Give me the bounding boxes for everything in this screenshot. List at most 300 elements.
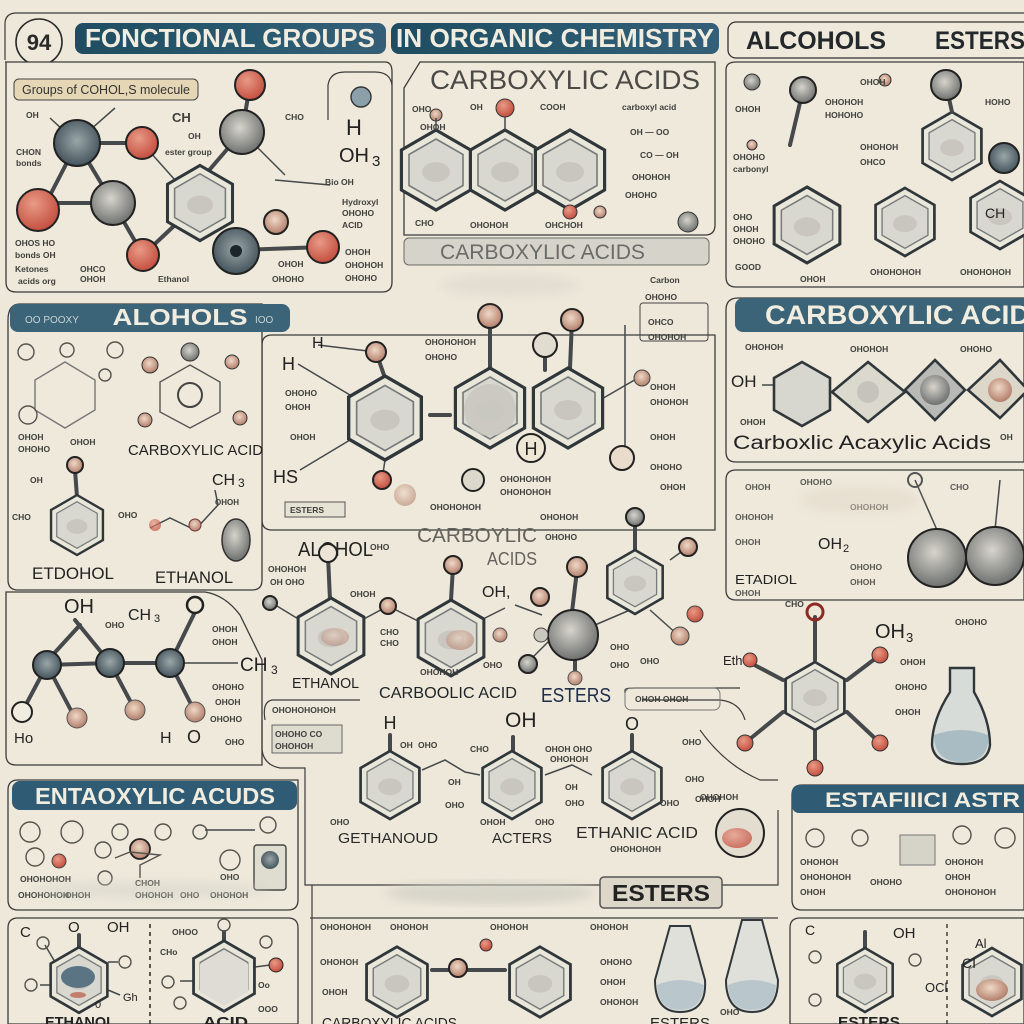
banner: ENTAOXYLIC ACUDS — [35, 783, 275, 809]
small box: ESTERS — [290, 505, 324, 515]
notes: OHOH OHO — [545, 744, 593, 754]
notes: OHOHO — [733, 236, 766, 246]
small notes: OHOHOH — [345, 260, 383, 270]
labels: H and HS: HS — [273, 467, 298, 487]
notes — [735, 477, 969, 598]
notes: OHOH — [212, 624, 238, 634]
small notes: OHOS HO — [15, 238, 56, 248]
notes: OHOHOH — [540, 512, 578, 522]
banner: ESTAFIIICI ASTR — [825, 789, 1020, 812]
notes: Carbon — [650, 275, 680, 285]
notes: OHOH — [285, 402, 310, 412]
small notes: Ketones — [15, 264, 49, 274]
notes: OHOHOHOH — [320, 922, 371, 932]
labels: O — [187, 727, 201, 747]
label: OH3 and notes: OHOHO — [955, 617, 988, 627]
doodles and notes: OHOHOHOH — [945, 887, 996, 897]
notes: OHOHO — [800, 477, 832, 487]
notes: OHOHOHOH — [960, 267, 1011, 277]
notes: OHO — [483, 660, 503, 670]
small notes: ester group — [165, 147, 212, 157]
notes: OHOH — [660, 482, 686, 492]
label: ethanol: ETHANOL — [292, 675, 359, 692]
title banner left: FONCTIONAL GROUPS — [85, 23, 375, 53]
panel: centre molecule — [262, 275, 715, 530]
labels — [735, 536, 849, 587]
heading: carboxylic acids faded: CARBOYLIC — [417, 525, 537, 547]
notes: OHOH — [480, 817, 506, 827]
notes: OHOHOH — [648, 332, 686, 342]
notes: OHO — [565, 798, 585, 808]
molecule: two rings — [367, 939, 570, 1017]
notes: OHO — [685, 774, 705, 784]
alcohols esters tab — [728, 22, 1024, 58]
notes: OHOH — [735, 104, 760, 114]
labels: H and HS — [273, 335, 324, 487]
notes: OHOHOHOH — [500, 474, 551, 484]
labels — [14, 596, 278, 747]
box: top left: OHOHOHOHOH — [272, 705, 336, 715]
icon: small atom — [328, 72, 392, 120]
notes: OHO — [180, 890, 200, 900]
notes: OHO — [720, 1007, 740, 1017]
notes: OHOH — [733, 224, 758, 234]
notes — [740, 342, 1013, 442]
labels: H and OH3: 3 — [372, 153, 380, 170]
notes: OHOH — [800, 274, 826, 284]
notes: OHOHO — [645, 292, 678, 302]
title banner right: IN ORGANIC CHEMISTRY — [396, 23, 714, 53]
labels: 3 — [154, 613, 160, 625]
banner: alohols: OO POOXY — [25, 315, 79, 326]
label: OH3 and notes: OHOH — [895, 707, 920, 717]
labels: H and OH3 — [339, 115, 380, 170]
dashed divider — [149, 924, 151, 1024]
labels: names — [338, 825, 698, 847]
captions — [322, 1015, 710, 1024]
label: OH: OH, — [482, 584, 510, 601]
labels: CH — [128, 607, 151, 624]
notes: carbonyl — [733, 164, 768, 174]
small notes: CHO — [285, 112, 304, 122]
label: OH3 and notes: OHOH — [900, 657, 926, 667]
notes: OHOHO — [545, 532, 578, 542]
labels: 0 — [95, 999, 101, 1011]
notes: OHO — [660, 798, 680, 808]
notes: CHO — [380, 627, 399, 637]
notes: OHO — [220, 872, 240, 882]
tag: alcohols — [14, 79, 198, 100]
number badge: 94 — [27, 30, 52, 55]
notes: OHOHOH — [735, 512, 773, 522]
labels: H OH O: OH — [505, 709, 536, 732]
notes: OHOHOH — [470, 220, 508, 230]
notes: OHOH — [735, 537, 760, 547]
notes — [285, 275, 688, 522]
label: OH3 and notes: OH — [875, 621, 905, 643]
small box right — [640, 303, 708, 341]
notes — [330, 737, 738, 854]
molecule: ethanol ring — [25, 935, 131, 1013]
notes: OHOHOH — [860, 142, 898, 152]
notes: CHO — [470, 744, 489, 754]
notes: OHOHOHOH — [870, 267, 921, 277]
small notes: OHOH — [80, 274, 106, 284]
notes: OHOHO — [285, 388, 318, 398]
box: top left: OHOHO CO — [275, 729, 323, 739]
small notes: Hydroxyl — [342, 197, 378, 207]
notes: OHOHO — [650, 462, 682, 472]
labels: H and OH3: H — [346, 115, 362, 140]
panel: carboxylic acids top — [401, 62, 715, 235]
notes — [12, 432, 239, 522]
note box right — [625, 688, 740, 710]
labels: OCl — [925, 980, 948, 995]
notes: OHOH — [650, 382, 676, 392]
molecule: two rings — [263, 544, 507, 676]
notes: OHOH — [212, 637, 238, 647]
small notes: CH — [172, 110, 191, 125]
small notes: OH — [26, 110, 39, 120]
notes: OHOHOH — [420, 667, 458, 677]
labels: 2 — [843, 543, 849, 555]
doodles and notes: OHOHOH — [800, 857, 838, 867]
notes: OHOHOH — [490, 922, 528, 932]
tag: carboxylic acids centre — [404, 238, 709, 265]
notes: OHOHO — [600, 957, 632, 967]
notes: OHOH — [215, 697, 240, 707]
notes: OHOH — [745, 482, 770, 492]
notes: OHO — [682, 737, 702, 747]
notes: CO — OH — [640, 150, 679, 160]
molecule: ethanol ring — [51, 457, 103, 555]
notes: OHOHOH — [320, 957, 358, 967]
notes: OH — [1000, 432, 1013, 442]
labels: H and HS: H — [312, 335, 324, 352]
notes: OH — [470, 102, 483, 112]
panel: bottom right esters — [790, 918, 1024, 1024]
notes: OHO — [105, 620, 125, 630]
notes: OHOH — [695, 794, 720, 804]
notes: OHOH — [735, 588, 760, 598]
labels: H and HS: H — [282, 354, 295, 374]
molecule: ester rings — [809, 932, 1021, 1016]
number badge — [16, 19, 62, 65]
banner: alohols: IOO — [255, 315, 274, 326]
label: OH3 and notes: OHOHO — [895, 682, 928, 692]
tag: esters: ESTERS — [612, 880, 710, 906]
tag: carboxylic acids centre: CARBOXYLIC ACIDS — [440, 241, 645, 264]
small notes: acids org — [18, 276, 56, 286]
notes: OH — [30, 475, 43, 485]
small notes: bonds OH — [15, 250, 56, 260]
panel: bottom centre esters — [310, 877, 778, 1024]
notes: OHOHO — [850, 562, 882, 572]
icon: round atom — [716, 809, 764, 857]
molecule: acid ring: CHo — [160, 947, 177, 957]
labels: C — [805, 922, 815, 938]
notes: CHO — [950, 482, 969, 492]
labels: 3 — [271, 663, 278, 677]
labels — [32, 564, 233, 587]
labels: CH — [240, 655, 267, 676]
notes: OHOHOH — [850, 502, 888, 512]
molecule: ethanol chain: 3 — [238, 476, 245, 490]
notes: OHO — [610, 642, 630, 652]
molecule: ester ring — [515, 508, 703, 685]
small notes: OHOHO — [342, 208, 374, 218]
notes — [412, 102, 679, 230]
labels: H OH O: O — [625, 714, 639, 734]
small notes: OHOHO — [272, 274, 304, 284]
notes: OHOHOH — [825, 97, 863, 107]
doodle atoms — [20, 817, 286, 890]
notes: OHOH — [420, 122, 446, 132]
notes: OHOH — [650, 432, 676, 442]
notes: OHO — [118, 510, 138, 520]
doodles and notes: OHOHOHOH — [800, 872, 851, 882]
notes: OHOH — [322, 987, 348, 997]
notes: OH — OO — [630, 127, 670, 137]
notes — [320, 922, 740, 1017]
labels: CI — [962, 955, 976, 971]
labels: ETADIOL — [735, 572, 797, 587]
molecule: central rings: H — [524, 439, 538, 459]
notes: carboxyl acid — [622, 102, 676, 112]
banner: alohols — [10, 304, 290, 332]
small notes: bonds — [16, 158, 42, 168]
labels: H — [160, 730, 172, 747]
molecule: central rings — [298, 304, 650, 506]
notes: CHO — [415, 218, 434, 228]
heading: carboxylic acids faded: ACIDS — [487, 549, 537, 569]
doodles and notes: OHOH — [945, 872, 970, 882]
notes: OHOHOH — [210, 890, 248, 900]
box: top left — [272, 705, 342, 753]
notes: OHOHOH — [268, 564, 306, 574]
notes: OHO — [330, 817, 350, 827]
molecule: chain: OH — [731, 372, 756, 391]
small notes: OH — [188, 131, 201, 141]
labels — [805, 922, 987, 1024]
small notes: CHON — [16, 147, 41, 157]
panel: carboxylic acids lower left — [8, 780, 298, 910]
banner: alohols: ALOHOLS — [112, 304, 248, 330]
notes: OHOHO — [212, 682, 244, 692]
notes: CHO — [380, 638, 399, 648]
notes: OHOHOHOH — [18, 890, 69, 900]
box: top left: OHOHOH — [275, 741, 313, 751]
small notes — [15, 110, 383, 286]
molecule: acid ring: Oo — [258, 980, 270, 990]
labels: Gh — [123, 992, 138, 1004]
notes: OH — [448, 777, 461, 787]
molecule: acid ring: OOO — [258, 1004, 278, 1014]
molecule: upper ring structures — [18, 342, 247, 428]
molecule: acid ring: OHOO — [172, 927, 198, 937]
small notes: OHOH — [278, 259, 304, 269]
label: OH3 and notes — [723, 599, 988, 717]
heading: CARBOXYLIC ACIDS — [430, 65, 700, 95]
labels: ETDOHOL — [32, 564, 114, 583]
label: OH3 and notes: Eth — [723, 653, 743, 668]
faded banner — [385, 881, 595, 905]
labels: C — [20, 924, 31, 941]
notes: GOOD — [735, 262, 761, 272]
label: carboxylic acid: CARBOOLIC ACID — [379, 685, 517, 702]
molecule: ethanol chain — [149, 472, 250, 561]
notes: OHO — [370, 542, 390, 552]
notes: OHOHOHOH — [425, 337, 476, 347]
labels: Al — [975, 936, 987, 951]
small notes: Ethanol — [158, 274, 189, 284]
notes: OHOHOH — [590, 922, 628, 932]
molecule: ball and stick — [17, 70, 339, 274]
notes: OHO — [445, 800, 465, 810]
notes: CHO — [12, 512, 31, 522]
labels: ETHANOL — [155, 568, 233, 587]
notes: OHOH — [740, 417, 766, 427]
notes: OHO — [225, 737, 245, 747]
notes — [733, 77, 1011, 284]
notes — [268, 532, 660, 677]
notes: OHOHO — [210, 714, 242, 724]
notes: OHOH — [70, 437, 96, 447]
notes: OHO — [535, 817, 555, 827]
labels: H OH O — [384, 709, 639, 734]
flask: left — [655, 926, 705, 1012]
notes: OHOHOH — [650, 397, 688, 407]
molecule: chain — [12, 597, 238, 728]
note box right: OHOH OHOH — [635, 694, 688, 704]
molecule: chain of three rings — [361, 735, 661, 819]
caption: Carboxlic Acaxylic Acids — [733, 433, 991, 454]
small notes: OHOH — [345, 247, 370, 257]
notes: OHO — [418, 740, 438, 750]
notes: OHO — [610, 660, 630, 670]
doodles and notes: OHOHO — [870, 877, 902, 887]
notes: OHOHO — [960, 344, 992, 354]
notes: OHOH — [290, 432, 316, 442]
notes: OHOHOH — [135, 890, 173, 900]
notes: CHOH — [135, 878, 160, 888]
molecule: chain — [731, 360, 1024, 426]
label: OH3 and notes: CHO — [785, 599, 804, 609]
labels: OH — [64, 596, 94, 618]
panel: rings chain centre — [262, 688, 778, 885]
notes: OHCHOH — [545, 220, 583, 230]
notes: OH — [565, 782, 578, 792]
flask: right — [726, 920, 778, 1012]
label: esters: ESTERS — [541, 685, 611, 707]
panel: alcohol / ester molecules centre — [263, 508, 703, 707]
panel: molecule overview top left — [5, 62, 392, 292]
doodles and notes — [800, 826, 1015, 897]
labels: OH — [893, 925, 916, 942]
notes: OHCO — [860, 157, 886, 167]
molecule: red-atom ring right — [737, 604, 888, 776]
labels: names: GETHANOUD — [338, 830, 438, 847]
banner — [792, 785, 1024, 813]
labels: names: ETHANIC ACID — [576, 825, 698, 842]
small notes: Bio OH — [325, 177, 354, 187]
small box — [285, 502, 345, 517]
notes: OHOHO — [733, 152, 766, 162]
notes: OHOHOH — [550, 754, 588, 764]
panel: bottom left ethanol and acid — [8, 918, 298, 1024]
notes: OHOH — [65, 890, 90, 900]
tag: esters — [600, 877, 722, 908]
notes: OHOHOH — [745, 342, 783, 352]
notes: HOHO — [985, 97, 1011, 107]
notes — [18, 872, 248, 900]
notes: HOHOHO — [825, 110, 864, 120]
notes: OHOHOH — [700, 792, 738, 802]
molecule: acid ring — [160, 919, 283, 1014]
labels: H and OH3: OH — [339, 145, 369, 167]
alcohols esters tab: ALCOHOLS — [746, 27, 886, 55]
notes: COOH — [540, 102, 566, 112]
small notes: ACID — [342, 220, 363, 230]
molecule: ethanol chain: CH — [212, 472, 235, 489]
notes: OHO — [412, 104, 432, 114]
notes: OHOHOH — [600, 997, 638, 1007]
notes: OHOHOHOH — [610, 844, 661, 854]
labels: Ho — [14, 730, 33, 747]
molecule: double spheres — [908, 473, 1024, 587]
tag: alcohols: Groups of COHOL,S molecule — [22, 82, 190, 97]
paper smudges — [30, 273, 920, 899]
notes: OHOHO — [625, 190, 658, 200]
notes: OHO — [733, 212, 753, 222]
label: OH3 and notes: 3 — [906, 630, 913, 645]
captions — [45, 1014, 248, 1024]
doodles and notes: OHOHOH — [945, 857, 983, 867]
panel: ester lower right — [792, 785, 1024, 910]
notes: OHOHO — [18, 444, 50, 454]
panel: chain molecule left — [6, 592, 278, 765]
notes: OHOH — [860, 77, 886, 87]
panel: carboxylic acid right — [726, 298, 1024, 462]
heading: carboxylic acids faded — [417, 525, 537, 569]
notes: OH OHO — [270, 577, 305, 587]
notes: OHOHOH — [632, 172, 670, 182]
small notes: OHCO — [80, 264, 106, 274]
notes: OHOH — [215, 498, 239, 507]
notes: OH — [400, 740, 413, 750]
labels: O — [68, 919, 80, 936]
notes: OHO — [640, 656, 660, 666]
title header — [5, 13, 1024, 65]
panel: ethanediol right — [726, 470, 1024, 600]
labels: names: ACTERS — [492, 830, 552, 847]
notes: OHOHOHOH — [500, 487, 551, 497]
notes: OHOHOH — [850, 344, 888, 354]
notes: OHOH — [600, 977, 626, 987]
notes: OHCO — [648, 317, 674, 327]
small notes: OHOHO — [345, 273, 378, 283]
notes: OHOHOH — [390, 922, 428, 932]
notes: OHOHOHOH — [430, 502, 481, 512]
notes: OHOHO — [425, 352, 458, 362]
notes — [105, 620, 245, 747]
molecule: rings — [744, 70, 1024, 263]
notes: OHOH — [18, 432, 44, 442]
molecule: three fused rings — [401, 99, 698, 232]
label: carboxylic acid: CARBOXYLIC ACID — [128, 442, 263, 459]
banner: CARBOXYLIC ACID — [765, 300, 1024, 330]
labels: H OH O: H — [384, 713, 396, 733]
